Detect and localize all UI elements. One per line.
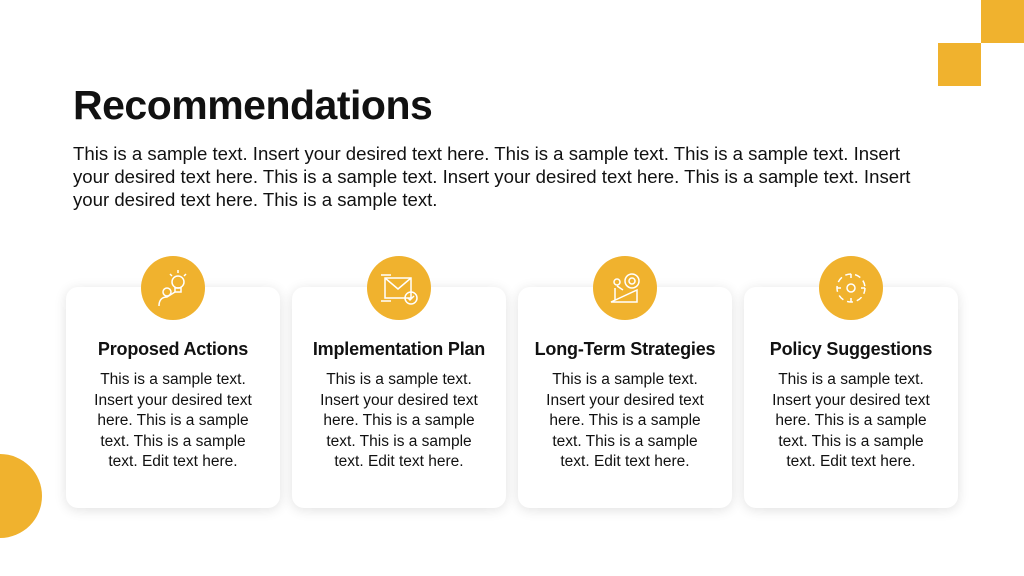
card: Long-Term Strategies: Long-Term Strategies <box>535 339 715 359</box>
intro text <box>73 143 910 210</box>
card: Long-Term Strategies: This is a sample text. Insert your desired text here. This is a sample text. This is a sample text. Edit text here. <box>546 371 704 470</box>
icon: target arrows <box>819 256 883 320</box>
card: Proposed Actions: Proposed Actions <box>98 339 248 359</box>
card: Implementation Plan: Implementation Plan <box>313 339 485 359</box>
card: Policy Suggestions: This is a sample text. Insert your desired text here. This is a sample text. This is a sample text. Edit text here. <box>772 371 930 470</box>
card: Implementation Plan: This is a sample text. Insert your desired text here. This is a sample text. This is a sample text. Edit text here. <box>320 371 478 470</box>
card: Implementation Plan <box>292 287 506 508</box>
icon: envelope check <box>367 256 431 320</box>
icon: person pushing gear <box>593 256 657 320</box>
card: Long-Term Strategies <box>518 287 732 508</box>
card: Policy Suggestions: Policy Suggestions <box>770 339 932 359</box>
card: Policy Suggestions <box>744 287 958 508</box>
decor: bottom-left circle <box>0 454 42 538</box>
intro text: your desired text here. This is a sample text. <box>73 189 437 210</box>
intro text: This is a sample text. Insert your desired text here. This is a sample text. This is a sample text. Insert <box>73 143 900 164</box>
icon: lightbulb person <box>141 256 205 320</box>
intro text: your desired text here. This is a sample text. Insert your desired text here. This is a sample text. Insert <box>73 166 910 187</box>
decor: top-right squares <box>981 0 1024 43</box>
card: Proposed Actions: This is a sample text. Insert your desired text here. This is a sample text. This is a sample text. Edit text here. <box>94 371 252 470</box>
card: Proposed Actions <box>66 287 280 508</box>
decor: square 2 <box>938 43 981 86</box>
title: Recommendations <box>73 82 432 128</box>
